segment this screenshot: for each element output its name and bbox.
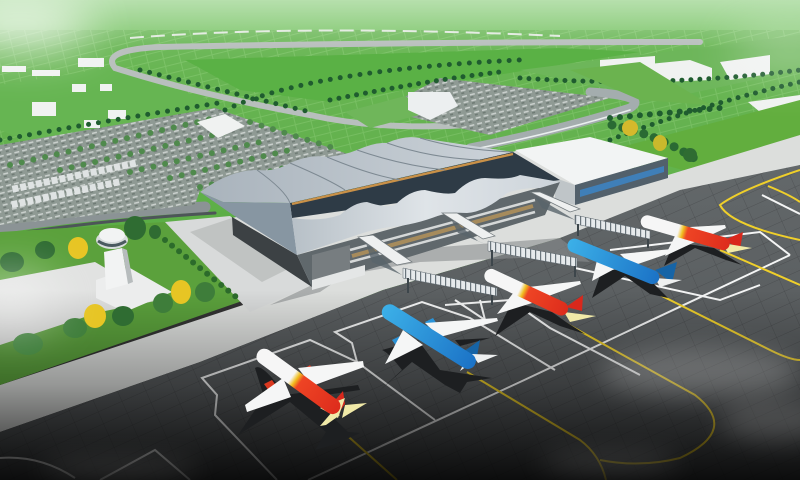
passenger boarding bridges [403,215,650,305]
plane 5 tail [724,232,743,249]
concrete forecourt band [0,135,800,432]
terminal left facade [232,217,312,287]
plane 4 fuselage [565,237,661,286]
jetway canopies [358,192,580,275]
front roof waves [292,175,560,255]
recess under roof [290,152,560,218]
plane 3 fuselage [482,267,570,318]
amber clerestory strip [292,154,513,204]
plane 1 engines [264,365,314,391]
plane 1 shadow [238,367,360,450]
tree rows [0,60,800,140]
apron shadow from terminal [270,238,590,305]
plane 2 wings [385,318,498,364]
left roof facet [200,192,297,255]
middle car park [345,78,610,135]
control tower [96,228,172,312]
plane 5 shadow [664,242,742,266]
apron tarmac [0,165,800,480]
landscape trees [0,120,697,355]
plane 3 wings [497,281,581,314]
plane 5 wings [665,225,726,256]
left plaza and lawn [0,216,312,385]
top haze [0,0,800,50]
plane 3 VietJet [482,267,596,336]
plane 4 Vietnam Airlines [565,237,682,298]
plane 2 engines [392,318,437,347]
plane 3 shadow [495,302,585,336]
apron yellow taxi lines [332,170,800,480]
plane 4 shadow [592,270,668,298]
left car park [0,108,365,225]
terminal building [200,137,560,290]
terminal front facade [297,182,560,290]
plane 1 VietJet [238,346,367,450]
plane 5 VietJet [639,214,752,266]
plane 4 tail [655,262,677,283]
plane 2 shadow [378,338,492,393]
plane 5 fuselage [639,214,731,252]
background farm fields [0,0,800,300]
plane 1 wings [245,361,364,412]
plane 1 tail [330,391,345,414]
plane 2 Vietnam Airlines [378,301,498,393]
right lawn [570,62,800,172]
access roads [0,42,700,236]
back roof waves [200,137,513,203]
plane 1 fuselage [253,346,344,417]
small service buildings [2,55,800,138]
plane 2 tail [463,340,480,362]
bottom dark vignette [0,290,800,480]
plane 2 fuselage [379,301,479,372]
apron white markings [0,195,800,480]
plane 4 wings [592,249,673,281]
annex building [515,137,668,205]
plane 3 tail [566,295,583,311]
